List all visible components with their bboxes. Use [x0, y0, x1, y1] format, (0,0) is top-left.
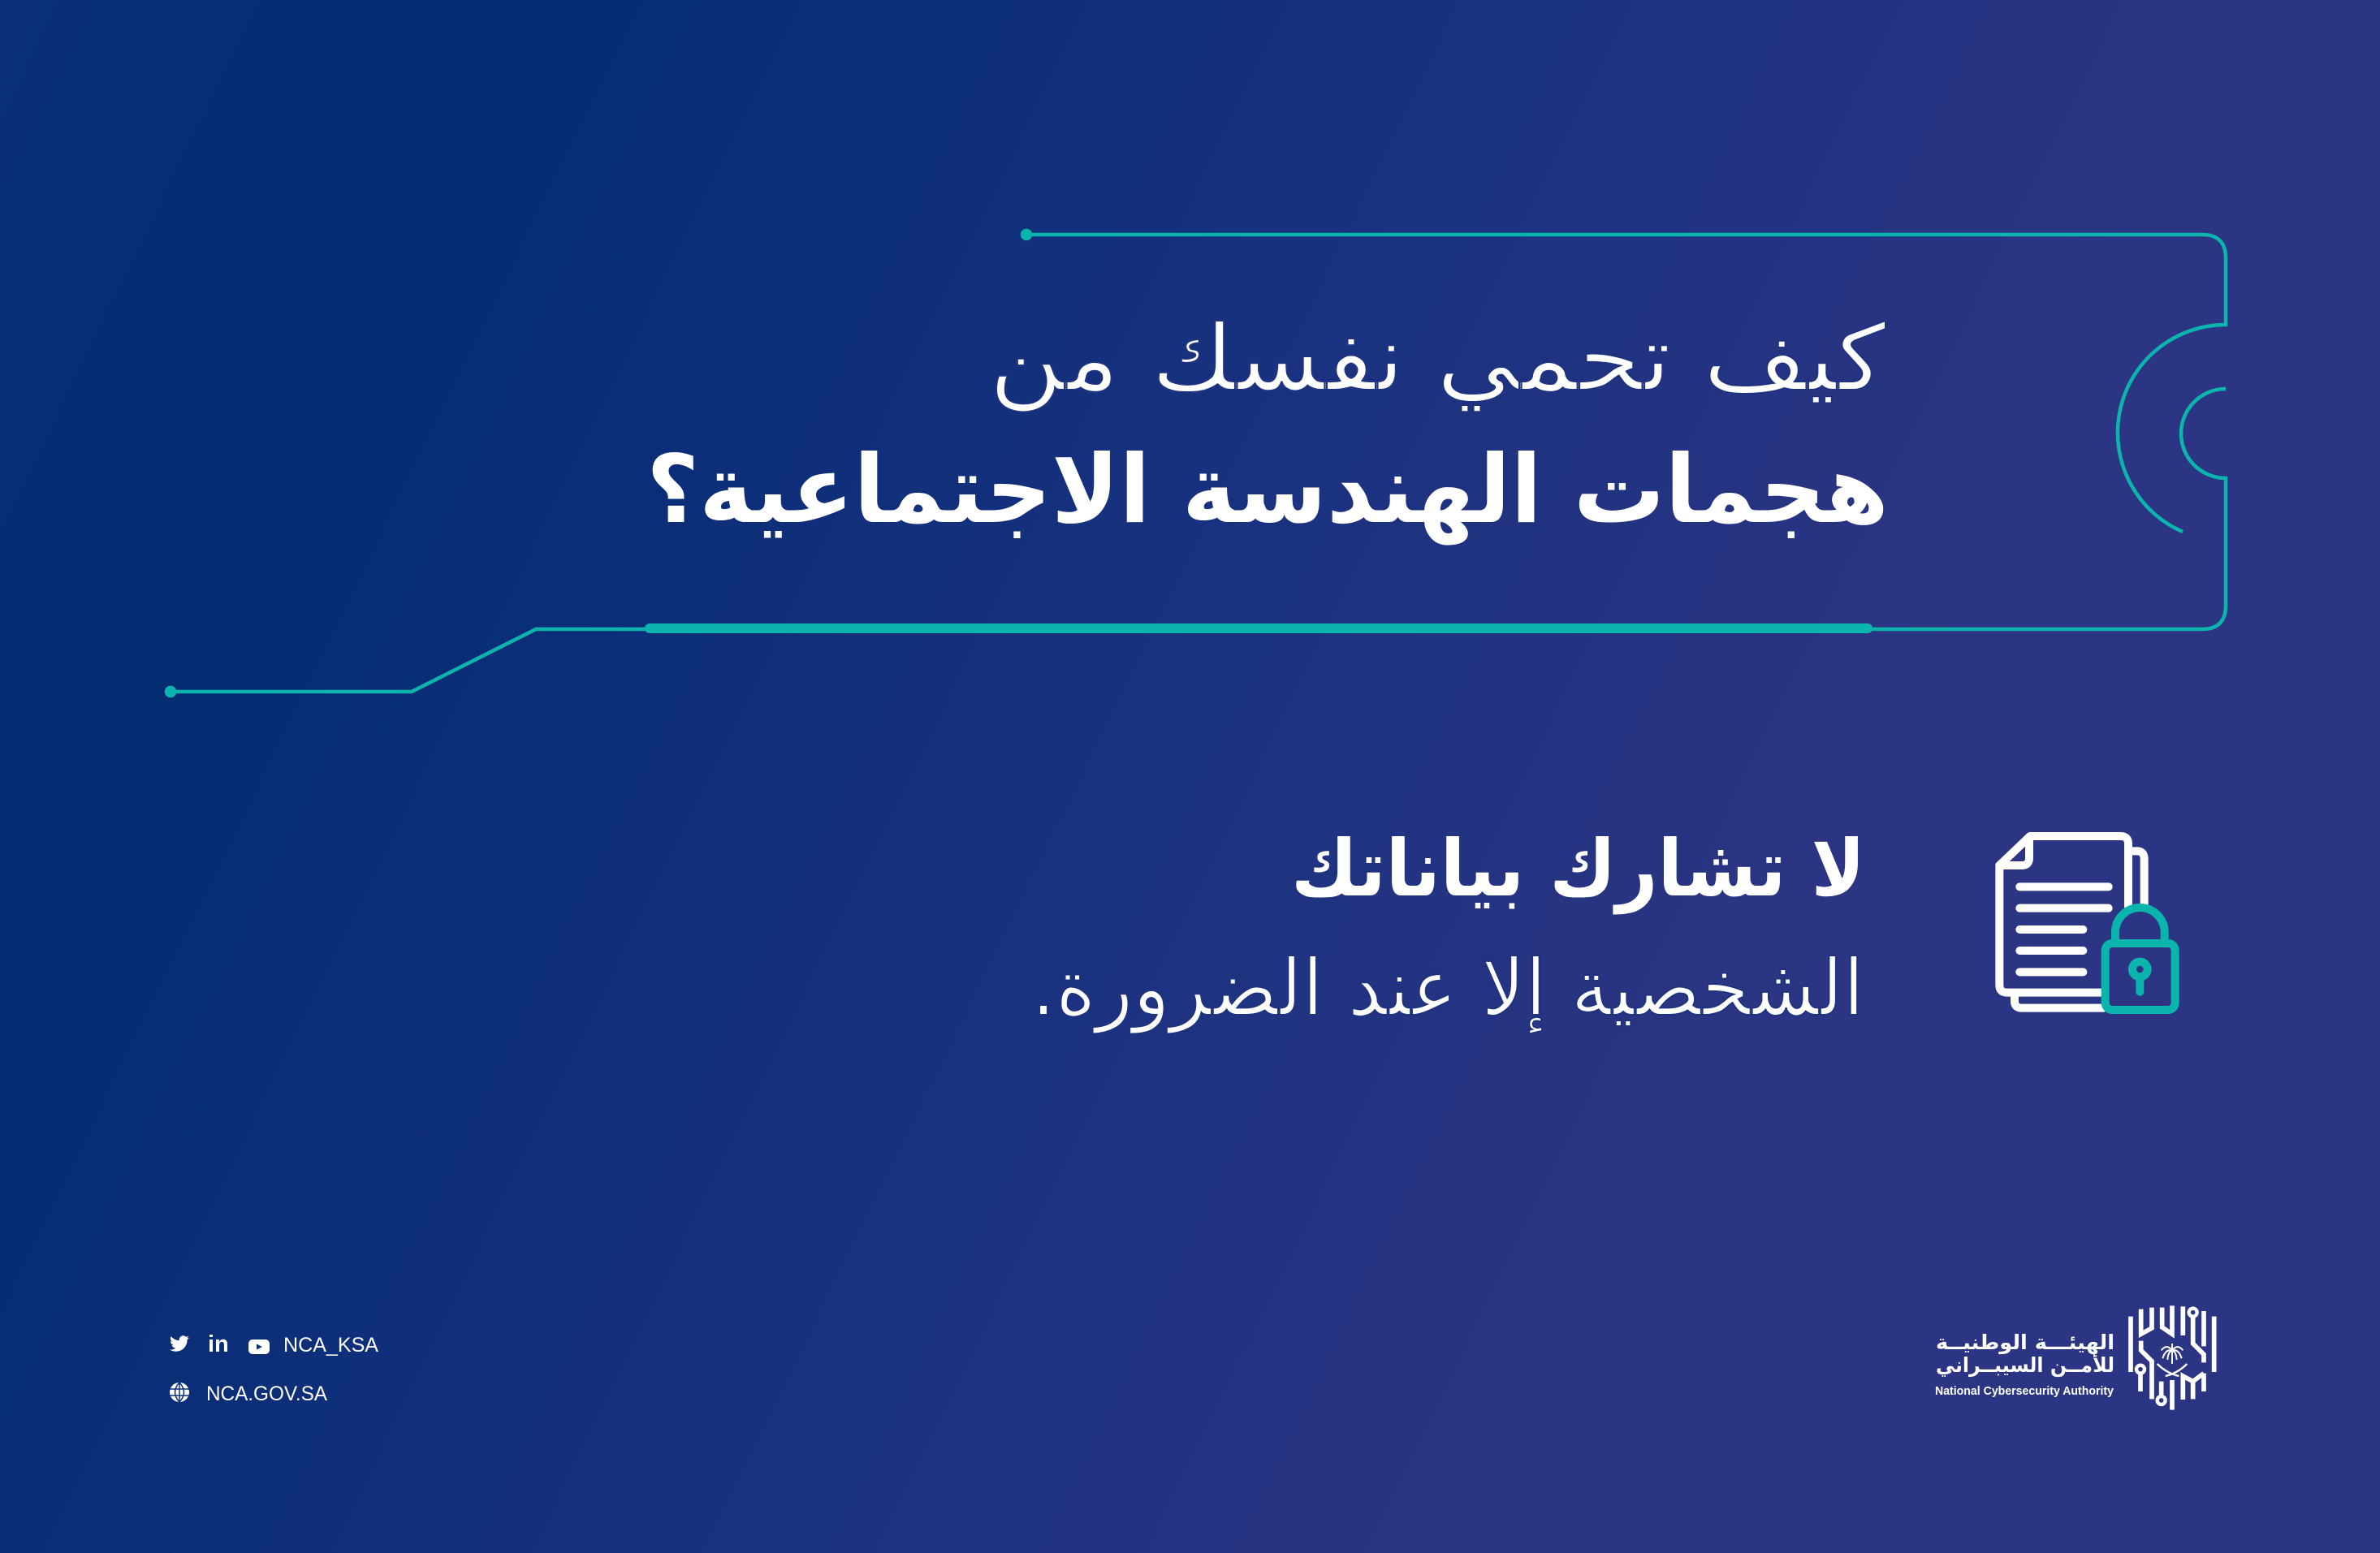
title frame circuit line [166, 231, 2226, 696]
logo Arabic name line 1: الهيئـــة الوطنيــة [1936, 1331, 2114, 1355]
icon: linkedin: in [208, 1331, 229, 1357]
logo Arabic name line 2: للأمــن السيبــراني [1936, 1352, 2114, 1378]
icon: youtube [248, 1339, 270, 1354]
logo emblem [2131, 1305, 2214, 1410]
thick accent bar [645, 623, 1872, 633]
handle text: NCA_KSA [283, 1334, 378, 1357]
social handle row [170, 1331, 378, 1405]
website text: NCA.GOV.SA [206, 1383, 327, 1405]
icon: twitter [170, 1335, 189, 1352]
message line 1: لا تشارك بياناتك [1291, 823, 1865, 914]
title line 2: هجمات الهندسة الاجتماعية؟ [646, 435, 1889, 546]
logo: National Cybersecurity Authority [1935, 1305, 2214, 1410]
logo English name: National Cybersecurity Authority [1935, 1384, 2114, 1398]
title line 1: كيف تحمي نفسك من [989, 306, 1886, 412]
icon: document with padlock [1999, 836, 2175, 1010]
message line 2: الشخصية إلا عند الضرورة.‏ [1031, 943, 1864, 1034]
icon: globe [170, 1383, 189, 1402]
